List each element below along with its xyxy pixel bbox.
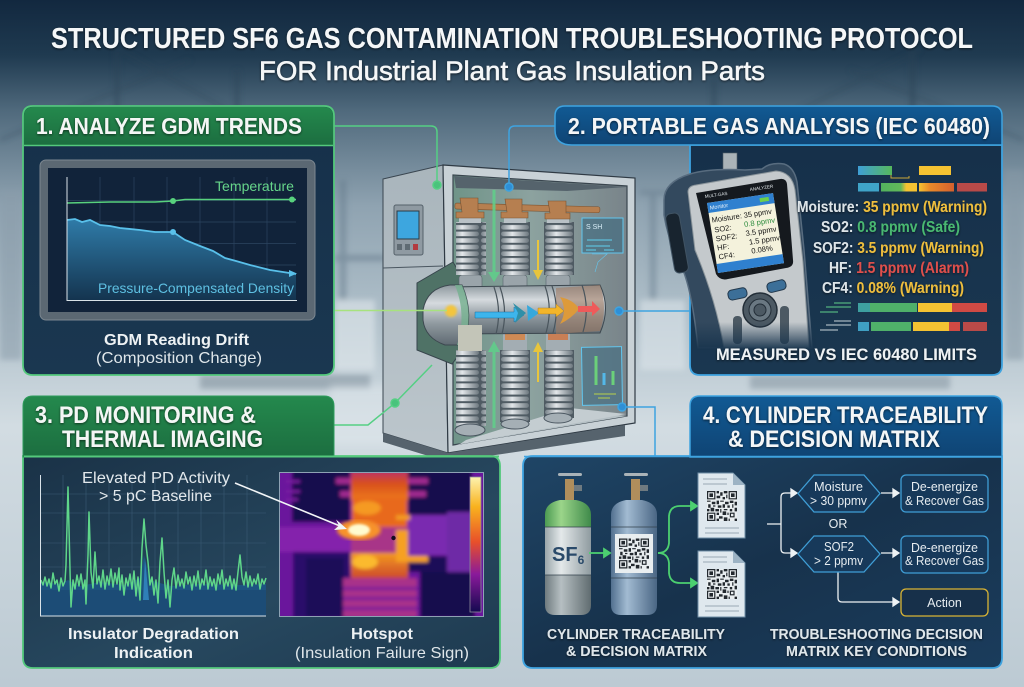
decision: moisture [798, 475, 880, 512]
action box 1 [901, 475, 988, 512]
PD annotation text: > 5 pC Baseline [99, 488, 212, 505]
upper insulators [456, 214, 574, 290]
analyzer screen: SOF2: [715, 231, 738, 244]
panel 3 captions: Indication [114, 645, 193, 662]
green flow arrows [488, 190, 500, 428]
line chart: GDM drift [67, 177, 297, 300]
panel 4 captions: & DECISION MATRIX [566, 644, 707, 660]
panel 1 caption: GDM Reading Drift [104, 332, 250, 349]
analyzer screen: 0.08% [751, 243, 774, 256]
action box 3 [901, 589, 988, 616]
analyzer screen: 0.8 ppmv [743, 215, 776, 229]
pipe flanges [494, 285, 586, 334]
panel 4 captions: TROUBLESHOOTING DECISION [770, 627, 983, 643]
cabinet side face [383, 165, 448, 453]
panel 4 captions [547, 627, 983, 660]
green-tinted cap rim [455, 285, 469, 345]
decision: moisture: Moisture [814, 480, 863, 494]
side divider [383, 266, 443, 268]
SF6 cylinder: 6 [578, 553, 585, 567]
thermal image [275, 468, 490, 620]
measured readings list: Moisture: 35 ppmv (Warning) [797, 199, 987, 216]
action box 2 [901, 536, 988, 573]
analyzer fade into panel [691, 322, 816, 350]
handheld gas analyzer: MULT-GAS [704, 191, 728, 199]
panel 2 frame [690, 145, 1002, 375]
monitor bezel [40, 160, 315, 320]
panel 4 header: & DECISION MATRIX [728, 426, 941, 453]
panel 3 captions: (Insulation Failure Sign) [295, 645, 469, 662]
panel 2 caption: MEASURED VS IEC 60480 LIMITS [716, 345, 977, 364]
OR label: OR [829, 517, 847, 531]
panel 2 header: 2. PORTABLE GAS ANALYSIS (IEC 60480) [568, 113, 990, 139]
action box 1: De-energize [911, 480, 978, 494]
contaminated pipe section [556, 285, 604, 334]
panel 3 captions [68, 626, 469, 662]
panel 3: PD monitoring and thermal imaging [23, 396, 500, 668]
PD chart [40, 475, 266, 616]
panel 1 frame [23, 106, 334, 375]
holographic status panel: S SH [586, 224, 602, 231]
pipe end cap [423, 285, 469, 345]
upper status bars [858, 166, 987, 192]
analyzer keypad [727, 279, 789, 344]
panel 3 frame [23, 456, 500, 668]
line chart: GDM drift: Temperature [215, 178, 294, 194]
arrow to hotspot [235, 483, 347, 530]
analyzer screen: 1.5 ppmv [748, 233, 781, 247]
decision flow connectors [767, 489, 899, 606]
panel 1 caption: (Composition Change) [96, 350, 262, 367]
cabinet interior [453, 175, 627, 445]
panel 2 header [555, 106, 1002, 145]
measured readings list [797, 199, 987, 297]
decision: SOF2: > 2 ppmv [814, 554, 864, 568]
lower insulators [455, 330, 574, 436]
handheld gas analyzer [664, 153, 816, 350]
central gas insulated switchgear illustration [383, 165, 635, 462]
decision: moisture: > 30 ppmv [810, 494, 868, 508]
line chart: GDM drift: Pressure-Compensated Density [98, 280, 294, 296]
panel 3 header [23, 396, 499, 457]
flow arrows through pipe [475, 297, 600, 324]
green traceability arrows [589, 502, 697, 587]
measured readings list: SO2: 0.8 ppmv (Safe) [821, 219, 960, 236]
SF6 cylinder: SF [552, 544, 578, 566]
action box 2: & Recover Gas [905, 554, 984, 568]
blue cylinder with QR label [611, 473, 657, 615]
panel 1 header [24, 107, 333, 146]
measured readings list: CF4: 0.08% (Warning) [822, 280, 964, 297]
handheld gas analyzer: ANALYZER [749, 184, 774, 192]
yellow flow arrows [533, 240, 543, 382]
interior ceiling [454, 176, 627, 191]
analyzer screen [707, 193, 784, 273]
monitor screen [48, 168, 307, 312]
analyzer screen: SO2: [714, 223, 732, 235]
panel 1 caption [96, 332, 262, 367]
bushing recess [417, 262, 470, 364]
panel 3 header: THERMAL IMAGING [62, 426, 263, 453]
PD baseline fill [41, 555, 266, 616]
connector: panel 1 to cabinet [334, 126, 447, 425]
decision: SOF2 [798, 536, 880, 572]
holographic bar chart panel [581, 347, 623, 405]
analyzer screen: CF4: [718, 250, 735, 262]
panel 3 captions: Insulator Degradation [68, 626, 239, 643]
title: FOR Industrial Plant Gas Insulation Parts [259, 56, 765, 86]
panel 1: analyze GDM trends [23, 106, 334, 375]
density line [67, 219, 296, 274]
T junction [458, 325, 482, 351]
panel 3 header: 3. PD MONITORING & [35, 402, 256, 429]
holographic status panel [582, 218, 623, 272]
axes [67, 177, 297, 300]
gas pipe [445, 285, 606, 334]
panel 4 header [524, 396, 1002, 457]
QR document 2 [698, 551, 745, 617]
measured readings list: HF: 1.5 ppmv (Alarm) [829, 260, 969, 277]
PD axes [40, 475, 266, 616]
QR document 1 [698, 473, 745, 538]
panel 2: portable gas analysis [555, 106, 1002, 375]
glow at pipe end [445, 305, 457, 317]
cabinet front frame [443, 165, 635, 453]
PD signal trace [41, 487, 266, 607]
panel 4 captions: CYLINDER TRACEABILITY [547, 627, 725, 643]
copper bus bars [455, 198, 600, 219]
SF6 cylinder [545, 473, 591, 615]
panel 4: cylinder traceability and decision matrix [523, 396, 1002, 668]
decision: SOF2: SOF2 [824, 540, 854, 554]
PD annotation text: Elevated PD Activity [82, 470, 230, 487]
connector: blue panels to cabinet [505, 126, 690, 456]
PD annotation text [82, 470, 230, 505]
action box 3: Action [927, 596, 962, 610]
temperature line [67, 200, 296, 203]
action box 1: & Recover Gas [905, 494, 984, 508]
analyzer screen: Monitor [709, 203, 729, 212]
analyzer screen: Moisture: 35 ppmv [711, 207, 773, 225]
title [51, 23, 973, 86]
lower limit bars [820, 303, 987, 331]
analyzer screen: 3.5 ppmv [745, 224, 777, 238]
panel 4 frame [523, 456, 1002, 668]
density area [67, 219, 296, 300]
panel 4 captions: MATRIX KEY CONDITIONS [786, 644, 967, 660]
panel 3 captions: Hotspot [351, 626, 414, 643]
action box 2: De-energize [911, 541, 978, 555]
panel 1 header: 1. ANALYZE GDM TRENDS [36, 113, 302, 139]
measured readings list: SOF2: 3.5 ppmv (Warning) [813, 240, 984, 257]
cabinet base [383, 425, 625, 462]
interior floor [456, 410, 627, 445]
analyzer screen: HF: [716, 242, 730, 253]
control panel with screen [394, 205, 423, 255]
